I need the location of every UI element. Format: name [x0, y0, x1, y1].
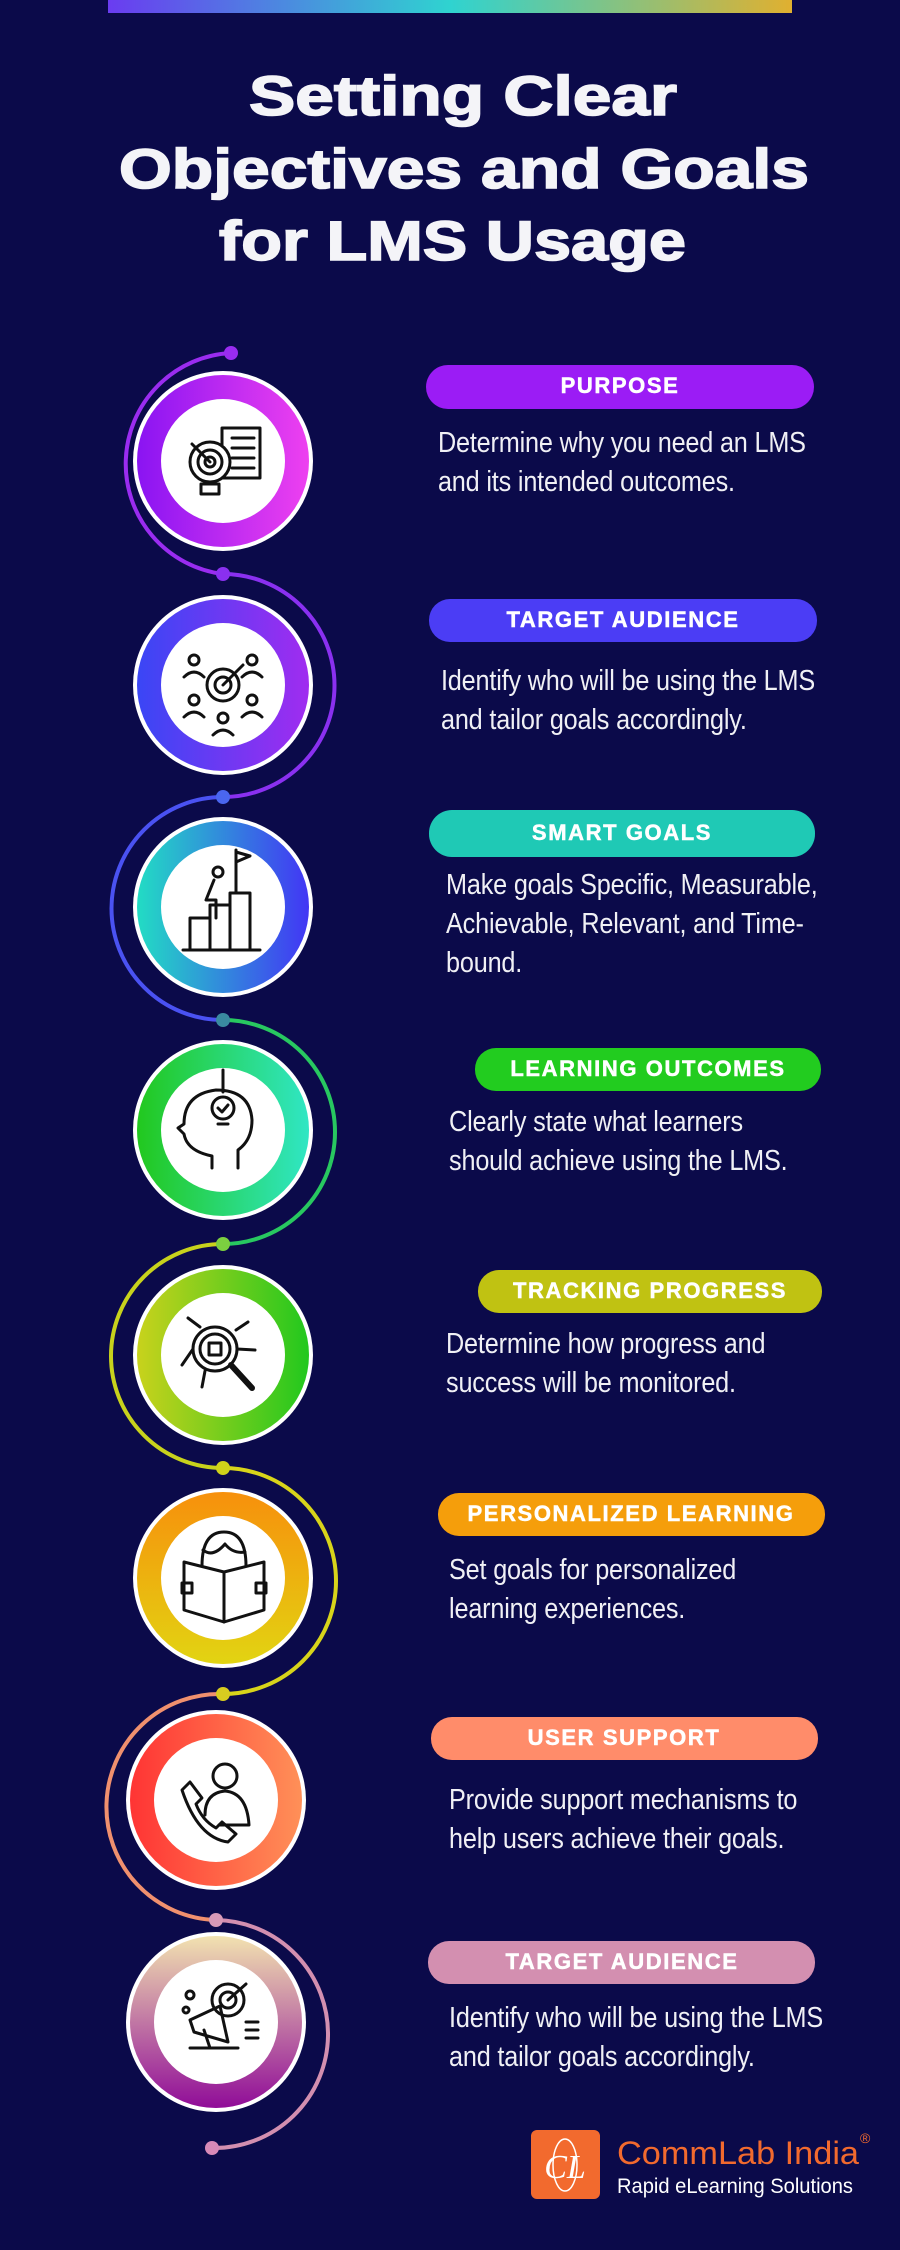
description: purpose: and its intended outcomes. [438, 464, 735, 497]
logo text: Rapid eLearning Solutions [617, 2175, 853, 2198]
icon ring: purpose [133, 371, 313, 551]
pill: PERSONALIZED LEARNING [438, 1493, 825, 1536]
item 6: personalized learning [133, 1488, 825, 1668]
pill: SMART GOALS [429, 810, 815, 857]
description: learning outcomes: Clearly state what learners [449, 1104, 743, 1137]
pill: LEARNING OUTCOMES: LEARNING OUTCOMES [510, 1056, 786, 1081]
pill: TRACKING PROGRESS [478, 1270, 822, 1313]
item 7: user support [126, 1710, 818, 1890]
pill: PURPOSE: PURPOSE [561, 373, 679, 398]
logo text [617, 2130, 871, 2198]
logo: CommLab India [531, 2130, 871, 2199]
item 8: target audience [126, 1932, 823, 2112]
description: tracking progress: Determine how progress and [446, 1326, 765, 1359]
icon ring: target audience [133, 595, 313, 775]
item 1: purpose [133, 365, 814, 551]
icon ring: smart goals [133, 817, 313, 997]
title [119, 64, 809, 272]
logo text: ® [860, 2130, 871, 2146]
pill: TRACKING PROGRESS: TRACKING PROGRESS [513, 1278, 787, 1303]
pill: USER SUPPORT [431, 1717, 818, 1760]
item 3: smart goals [133, 810, 818, 997]
description: target audience: and tailor goals accordingly. [441, 702, 747, 735]
description: user support: Provide support mechanisms to [449, 1782, 797, 1815]
item 2: target audience [133, 595, 817, 775]
description: user support: help users achieve their goals. [449, 1821, 784, 1854]
icon ring: user support [126, 1710, 306, 1890]
icon ring: tracking progress [133, 1265, 313, 1445]
title: Setting Clear [249, 64, 677, 127]
item 4: learning outcomes [133, 1040, 821, 1220]
item 5: tracking progress [133, 1265, 822, 1445]
pill: PURPOSE [426, 365, 814, 409]
description: learning outcomes: should achieve using the LMS. [449, 1143, 788, 1176]
description: purpose: Determine why you need an LMS [438, 425, 806, 458]
title: Objectives and Goals [119, 137, 809, 200]
description: personalized learning: Set goals for personalized [449, 1552, 736, 1585]
connector path [106, 346, 336, 2155]
description: target audience: Identify who will be using the LMS [441, 663, 815, 696]
icon ring: personalized learning [133, 1488, 313, 1668]
description: smart goals: Achievable, Relevant, and Time- [446, 906, 804, 939]
logo icon [531, 2130, 600, 2199]
pill: USER SUPPORT: USER SUPPORT [528, 1725, 720, 1750]
icon ring: learning outcomes [133, 1040, 313, 1220]
description: smart goals: Make goals Specific, Measurable, [446, 867, 818, 900]
title: for LMS Usage [219, 209, 686, 272]
logo text: CommLab India [617, 2135, 859, 2171]
description: target audience 2: Identify who will be using the LMS [449, 2000, 823, 2033]
top gradient bar [108, 0, 792, 13]
pill: PERSONALIZED LEARNING: PERSONALIZED LEARNING [468, 1501, 794, 1526]
pill: LEARNING OUTCOMES [475, 1048, 821, 1091]
description: target audience 2: and tailor goals accordingly. [449, 2039, 755, 2072]
icon ring: target audience 2 [126, 1932, 306, 2112]
description: personalized learning: learning experiences. [449, 1591, 685, 1624]
pill: SMART GOALS: SMART GOALS [532, 820, 712, 845]
logo icon: CL [544, 2149, 586, 2186]
description: tracking progress: success will be monitored. [446, 1365, 736, 1398]
pill: TARGET AUDIENCE 2: TARGET AUDIENCE [506, 1949, 738, 1974]
pill: TARGET AUDIENCE: TARGET AUDIENCE [506, 607, 740, 632]
pill: TARGET AUDIENCE 2 [428, 1941, 815, 1984]
description: smart goals: bound. [446, 945, 522, 978]
pill: TARGET AUDIENCE [429, 599, 817, 642]
